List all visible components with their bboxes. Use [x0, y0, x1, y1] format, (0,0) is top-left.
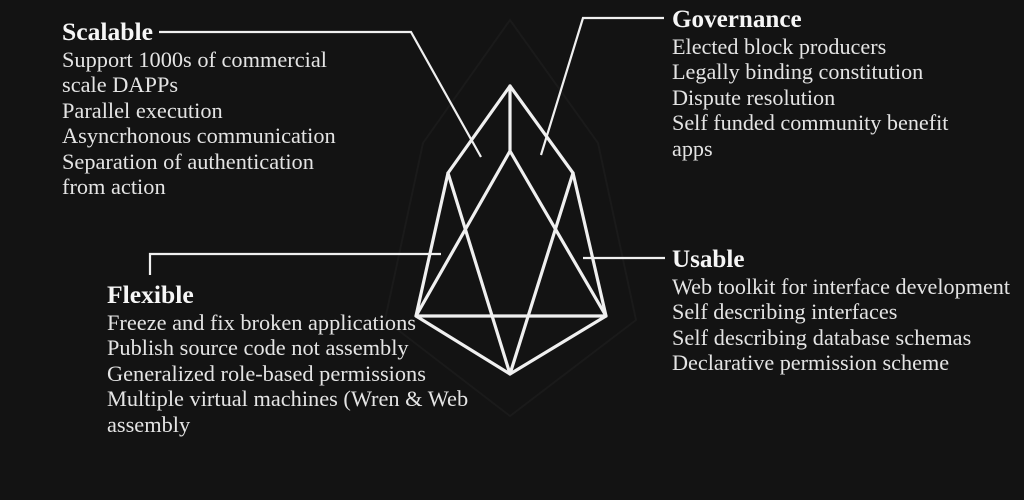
text block: Governance: Governance: [672, 6, 802, 33]
faint background logo outline: [385, 20, 636, 416]
text block: Governance: Dispute resolution: [672, 84, 835, 110]
icon: EOS logo: [416, 86, 606, 374]
text block: Flexible: Flexible: [107, 280, 194, 309]
text block: Flexible: Freeze and fix broken applications: [107, 310, 416, 334]
text block: Scalable: from action: [62, 174, 166, 199]
text block: Governance: [672, 6, 948, 160]
text block: Flexible: assembly: [107, 412, 190, 436]
text block: Usable: Self describing interfaces: [672, 299, 897, 324]
text block: Flexible: Publish source code not assembly: [107, 335, 409, 360]
text block: Scalable: Scalable: [62, 17, 153, 46]
text block: Scalable: [62, 17, 336, 199]
text block: Governance: Elected block producers: [672, 34, 886, 58]
text block: Governance: Self funded community benefit: [672, 110, 948, 135]
text block: Governance: apps: [672, 136, 713, 160]
text block: Usable: [672, 246, 1010, 375]
leader line: Governance: [541, 18, 664, 155]
text block: Scalable: Separation of authentication: [62, 149, 314, 174]
text block: Flexible: [107, 280, 468, 436]
text block: Flexible: Generalized role-based permissions: [107, 360, 426, 386]
text block: Usable: Usable: [672, 246, 744, 273]
leader line: Scalable: [159, 32, 481, 157]
text block: Usable: Web toolkit for interface development: [672, 274, 1010, 299]
text block: Scalable: Asyncrhonous communication: [62, 123, 336, 148]
leader line: Flexible: [150, 254, 441, 275]
text block: Scalable: scale DAPPs: [62, 72, 178, 97]
text block: Usable: Declarative permission scheme: [672, 350, 949, 375]
leader line: Usable: [583, 257, 665, 259]
text block: Scalable: Support 1000s of commercial: [62, 47, 327, 72]
text block: Governance: Legally binding constitution: [672, 59, 923, 84]
text block: Scalable: Parallel execution: [62, 98, 223, 123]
text block: Flexible: Multiple virtual machines (Wren & Web: [107, 386, 468, 411]
text block: Usable: Self describing database schemas: [672, 325, 971, 350]
